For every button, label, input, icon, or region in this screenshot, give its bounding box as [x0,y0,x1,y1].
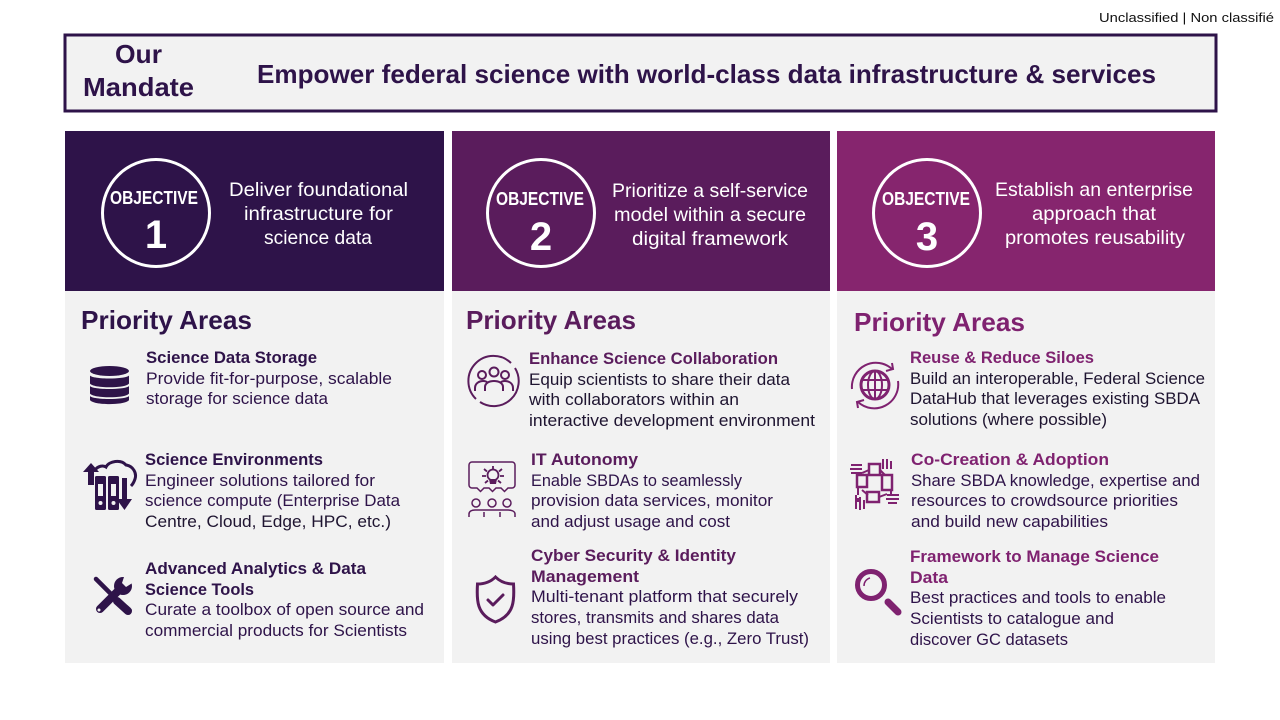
item: enhance science collaboration: Equip scientists to share their data [529,371,791,389]
item: co-creation: Share SBDA knowledge, expertise and [911,472,1200,490]
item: science data storage [146,349,392,408]
objective 2 header: digital framework [632,228,788,250]
objective 3 header: 3 [916,215,938,259]
item: cyber security: Management [531,568,640,586]
item: reuse and reduce siloes [910,349,1205,429]
mandate label [83,39,194,102]
icon: cloud servers [83,461,136,510]
item: science environments: Science Environments [145,451,323,469]
icon: interlocking hands [850,459,899,510]
item: it autonomy [531,451,774,531]
icon: globe with arrows [852,363,898,408]
item: science environments: Engineer solutions tailored for [145,472,376,490]
icon: presentation idea [469,462,515,517]
item: science data storage: Science Data Storage [146,349,317,367]
priority areas heading: Priority Areas [466,305,636,335]
mandate label: Mandate [83,72,194,102]
item: framework: discover GC datasets [910,631,1068,649]
item: science environments [145,451,401,531]
objective 1 header [65,131,444,291]
item: framework [910,548,1166,649]
icon: database [90,366,129,404]
item: enhance science collaboration: Enhance Science Collaboration [529,350,778,368]
objective 2 header: OBJECTIVE [496,189,584,209]
icon: shield [477,577,514,622]
item: cyber security: Cyber Security & Identity [531,547,737,565]
objective 1 header: 1 [145,213,167,257]
item: framework: Framework to Manage Science [910,548,1159,566]
item: enhance science collaboration: interactive development environment [529,412,815,430]
objective 3 header: Establish an enterprise [995,179,1193,201]
item: reuse and reduce siloes: Reuse & Reduce Siloes [910,349,1094,367]
item: science data storage: storage for science data [146,390,329,408]
item: it autonomy: Enable SBDAs to seamlessly [531,472,743,490]
objective 1 header: infrastructure for [244,203,394,225]
item: reuse and reduce siloes: solutions (where possible) [910,411,1107,429]
icon: magnifier [858,572,898,612]
mandate label: Our [115,39,162,69]
item: co-creation: resources to crowdsource priorities [911,492,1178,510]
item: it autonomy: and adjust usage and cost [531,513,730,531]
priority areas heading: Priority Areas [854,307,1025,337]
item: advanced analytics [145,560,424,640]
item: framework: Best practices and tools to enable [910,589,1166,607]
objective 3 header: OBJECTIVE [882,189,970,209]
icon: tools [96,574,134,612]
objective 2 header: model within a secure [614,204,806,226]
panel: objective 3 [837,131,1215,663]
item: framework: Data [910,569,949,587]
item: enhance science collaboration [528,350,815,430]
item: co-creation [911,451,1200,531]
item: science environments: science compute (Enterprise Data [145,492,401,510]
objective 2 header: 2 [530,215,552,259]
item: reuse and reduce siloes: DataHub that leverages existing SBDA [910,390,1200,408]
item: it autonomy: IT Autonomy [531,451,639,469]
objective 2 header: Prioritize a self-service [612,180,808,202]
item: framework: Scientists to catalogue and [910,610,1114,628]
item: science data storage: Provide fit-for-purpose, scalable [146,370,392,388]
item: co-creation: and build new capabilities [911,513,1108,531]
item: advanced analytics: commercial products for Scientists [145,622,407,640]
item: advanced analytics: Curate a toolbox of open source and [145,601,424,619]
item: advanced analytics: Advanced Analytics & Data [145,560,367,578]
objective 3 header [837,131,1215,291]
priority areas heading: Priority Areas [81,305,252,335]
item: cyber security: Multi-tenant platform that securely [531,588,799,606]
item: advanced analytics: Science Tools [145,581,254,599]
item: co-creation: Co-Creation & Adoption [911,451,1109,469]
item: reuse and reduce siloes: Build an interoperable, Federal Science [910,370,1205,388]
objective 1 header: OBJECTIVE [110,188,198,208]
mandate statement: Empower federal science with world-class data infrastructure & services [257,59,1156,89]
mandate banner [65,35,1216,111]
objective 3 header: promotes reusability [1005,227,1185,249]
icon: collaboration [468,356,519,406]
objective 1 header: science data [264,227,372,249]
item: enhance science collaboration: with collaborators within an [528,391,739,409]
panel: objective 2 [452,131,830,663]
item: cyber security: stores, transmits and shares data [531,609,780,627]
panel: objective 1 [65,131,444,663]
objective 2 header [452,131,830,291]
item: science environments: Centre, Cloud, Edge, HPC, etc.) [145,513,391,531]
objective 1 header: Deliver foundational [229,179,408,201]
item: cyber security: using best practices (e.g., Zero Trust) [531,630,809,648]
classification label: Unclassified | Non classifié [1099,10,1274,25]
objective 3 header: approach that [1032,203,1157,225]
item: cyber security [531,547,809,648]
item: it autonomy: provision data services, monitor [531,492,774,510]
